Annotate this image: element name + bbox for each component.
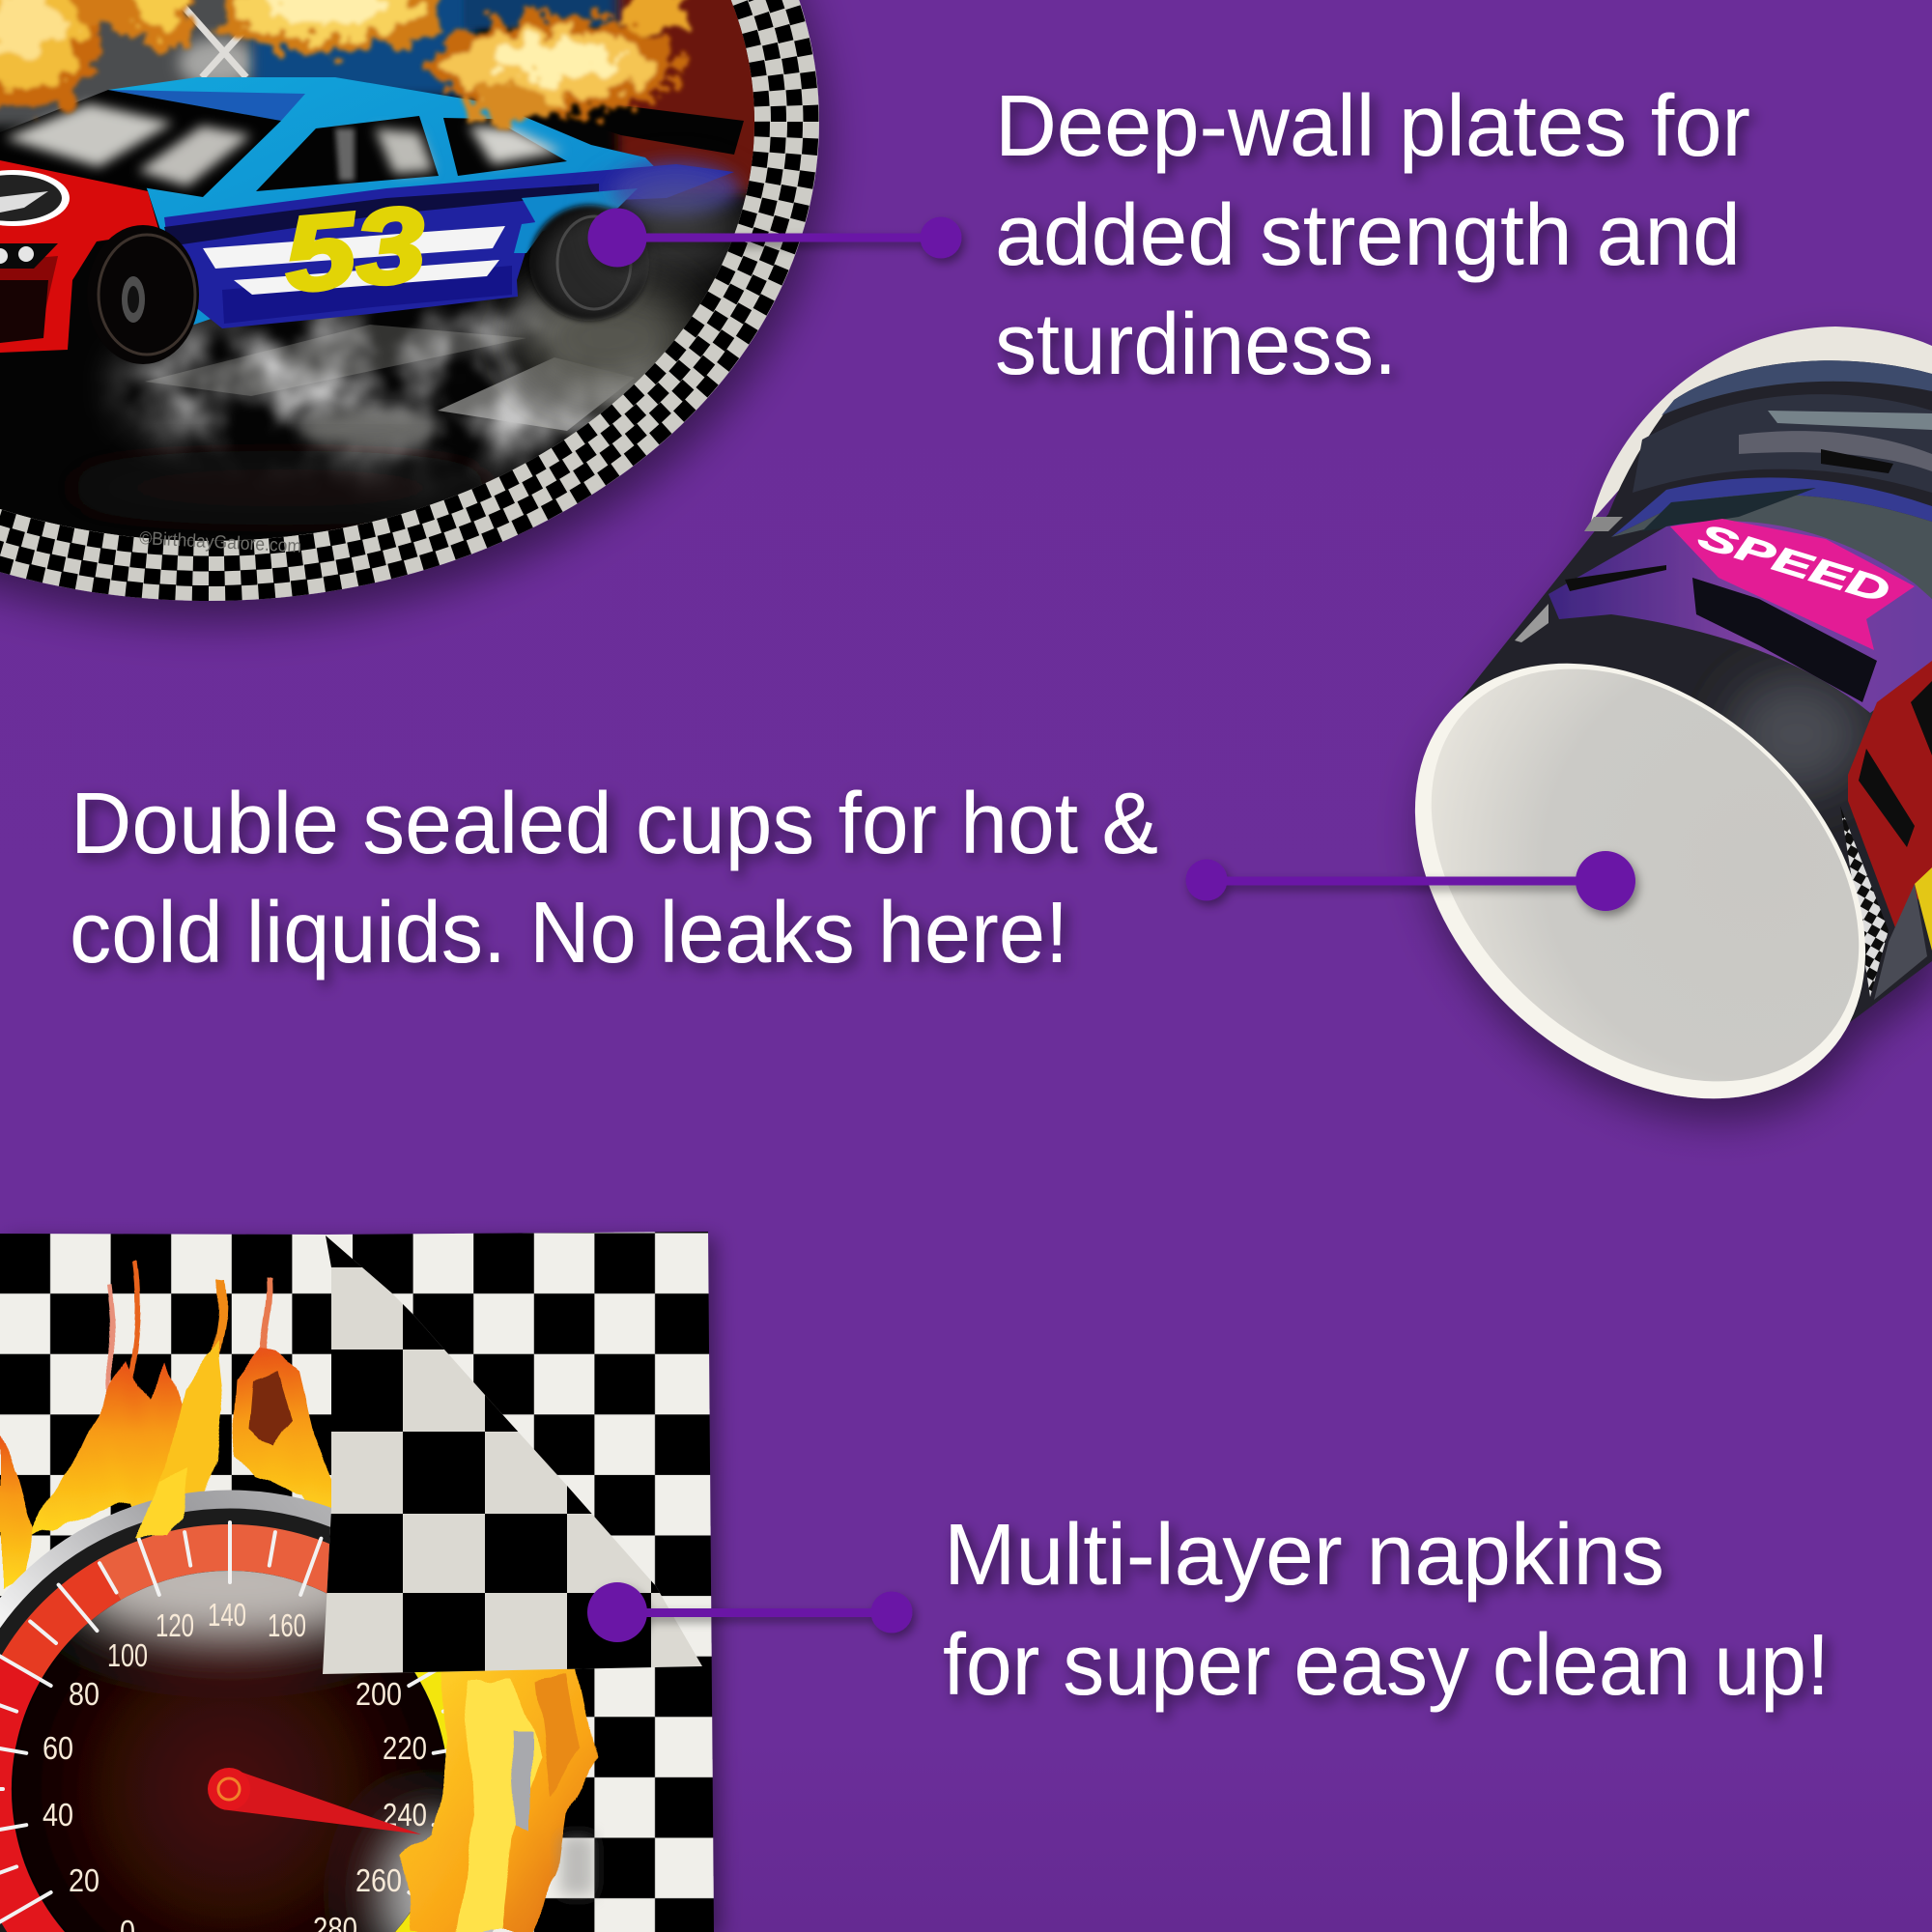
tyre smoke: [609, 184, 744, 270]
speed numbers: 80: [69, 1676, 99, 1712]
speed numbers: 140: [208, 1597, 246, 1633]
connector: cup: [1186, 851, 1635, 911]
hood logo: [0, 170, 70, 226]
flames in front of speedometer: [135, 1468, 595, 1932]
folded napkin corner: [314, 1232, 710, 1681]
plate checkered rim: [0, 0, 819, 601]
car number: 53: [279, 185, 431, 315]
text: napkins: Multi-layer napkins: [944, 1507, 1664, 1604]
text: cups: cold liquids. No leaks here!: [70, 885, 1068, 981]
text: plates: [995, 78, 1750, 393]
front wheel: [108, 225, 199, 364]
text: napkins: [943, 1507, 1830, 1714]
speed band: [0, 1548, 471, 1932]
text: plates: sturdiness.: [995, 297, 1397, 393]
napkin shading: [560, 1835, 594, 1895]
crossed flags: [182, 4, 249, 77]
side windows: [256, 116, 439, 191]
speedometer: [0, 1499, 520, 1932]
tick marks: [0, 1522, 493, 1932]
cup rim: [1591, 327, 1932, 522]
napkin checker pattern: [0, 1227, 720, 1932]
car: [0, 77, 739, 364]
cup wrap: [1447, 360, 1932, 1049]
checker on cup: [1840, 806, 1889, 997]
speed numbers: 240: [383, 1797, 427, 1833]
red car on cup: [1848, 661, 1932, 930]
speed numbers: 220: [383, 1730, 427, 1766]
text: cups: Double sealed cups for hot &: [71, 776, 1158, 872]
connector: plate: [587, 209, 962, 267]
windshield: [0, 90, 281, 197]
white stripes: [203, 226, 505, 269]
cup photo: [1329, 327, 1932, 1186]
speed numbers: 200: [355, 1676, 402, 1712]
speed numbers: 100: [107, 1637, 148, 1673]
speed numbers: 40: [43, 1797, 73, 1833]
speed numbers: 160: [268, 1607, 306, 1643]
speed numbers: 260: [355, 1862, 402, 1898]
text: napkins: for super easy clean up!: [943, 1617, 1830, 1714]
speed numbers: 120: [156, 1607, 194, 1643]
plate artwork: [0, 0, 792, 541]
speed numbers: [43, 1597, 427, 1932]
cup lettering: SPEED: [1694, 515, 1894, 611]
sky behind the car: [0, 0, 792, 193]
needle: [208, 1768, 421, 1834]
text: plates: Deep-wall plates for: [995, 78, 1750, 175]
cup base: [1329, 576, 1932, 1186]
connector: napkin: [587, 1582, 912, 1642]
plate photo: [0, 0, 819, 601]
text: cups: [70, 776, 1158, 981]
smoke and road: [58, 280, 705, 509]
spoiler: [611, 105, 744, 155]
dial face: [12, 1524, 493, 1932]
fire flames: [0, 0, 686, 122]
flames behind speedometer: [0, 1261, 332, 1591]
speed numbers: 20: [69, 1862, 99, 1898]
napkin photo: [0, 1227, 720, 1932]
red nose: [0, 160, 159, 353]
text: plates: added strength and: [995, 187, 1741, 284]
rear wheel: [529, 205, 649, 321]
speed numbers: 60: [43, 1730, 73, 1766]
watermark: ©BirthdayGalore.com: [139, 528, 302, 557]
